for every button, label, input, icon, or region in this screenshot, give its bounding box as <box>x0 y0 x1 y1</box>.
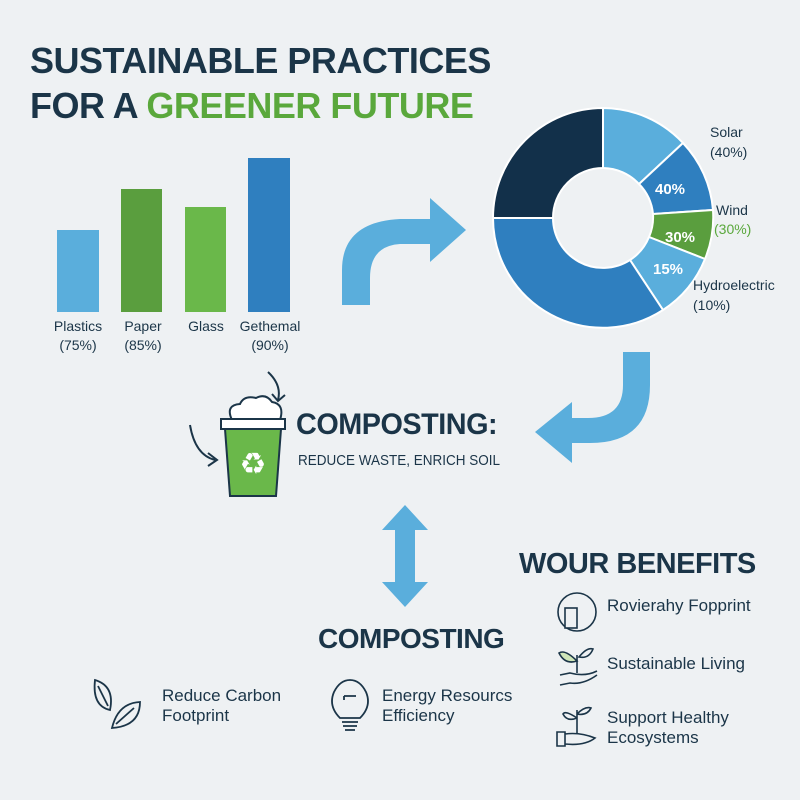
bar chart: Gethemal <box>240 318 300 334</box>
item: reduce carbon: Reduce Carbon <box>162 686 281 705</box>
icon: bulb <box>331 679 369 731</box>
bar chart: (85%) <box>124 337 162 353</box>
bar chart: Hydroelectric <box>693 277 775 293</box>
arrow: curved down-left <box>535 352 650 463</box>
bar chart: Wind <box>716 202 748 218</box>
title: SUSTAINABLE PRACTICES <box>30 40 491 81</box>
heading: composting 2: COMPOSTING <box>318 623 504 654</box>
donut chart <box>493 108 713 328</box>
arrow: double vertical <box>382 505 428 607</box>
bar chart: Glass <box>188 318 224 334</box>
list: benefits: Ecosystems <box>607 728 699 747</box>
icon: leaves <box>94 678 141 729</box>
list: benefits: Support Healthy <box>607 708 729 727</box>
bar chart: (75%) <box>59 337 97 353</box>
list: benefits <box>556 592 751 747</box>
icon: recycle <box>557 592 597 632</box>
text: reduce waste: REDUCE WASTE, ENRICH SOIL <box>298 452 500 469</box>
item: energy <box>331 679 512 731</box>
bar chart: (40%) <box>710 144 747 160</box>
item: energy: Efficiency <box>382 706 454 725</box>
heading: benefits: WOUR BENEFITS <box>519 548 756 580</box>
title: FOR A GREENER FUTURE <box>30 85 473 126</box>
arrow: small thin arrows <box>190 372 285 466</box>
bar chart: Solar <box>710 124 743 140</box>
list: benefits: Rovierahy Fopprint <box>607 596 751 615</box>
bar chart: 40% <box>655 181 685 198</box>
heading: composting: COMPOSTING: <box>296 408 497 441</box>
bar chart: 30% <box>665 229 695 246</box>
list: benefits: Sustainable Living <box>607 654 745 673</box>
item: energy: Energy Resourcs <box>382 686 512 705</box>
icon: compost bin: ♻ <box>240 448 266 481</box>
bar chart: Paper <box>124 318 162 334</box>
arrow: curved up-right <box>342 198 466 305</box>
icon: plant in hand <box>558 648 598 686</box>
bar chart: (90%) <box>251 337 289 353</box>
icon: hand with sprout <box>556 706 596 747</box>
icon: compost bin <box>221 396 285 496</box>
bar chart: Plastics <box>54 318 102 334</box>
item: reduce carbon: Footprint <box>162 706 229 725</box>
bar chart: 15% <box>653 261 683 278</box>
item: reduce carbon <box>94 678 281 729</box>
title <box>30 40 491 126</box>
bar chart: (30%) <box>714 221 751 237</box>
bar chart: (10%) <box>693 297 730 313</box>
